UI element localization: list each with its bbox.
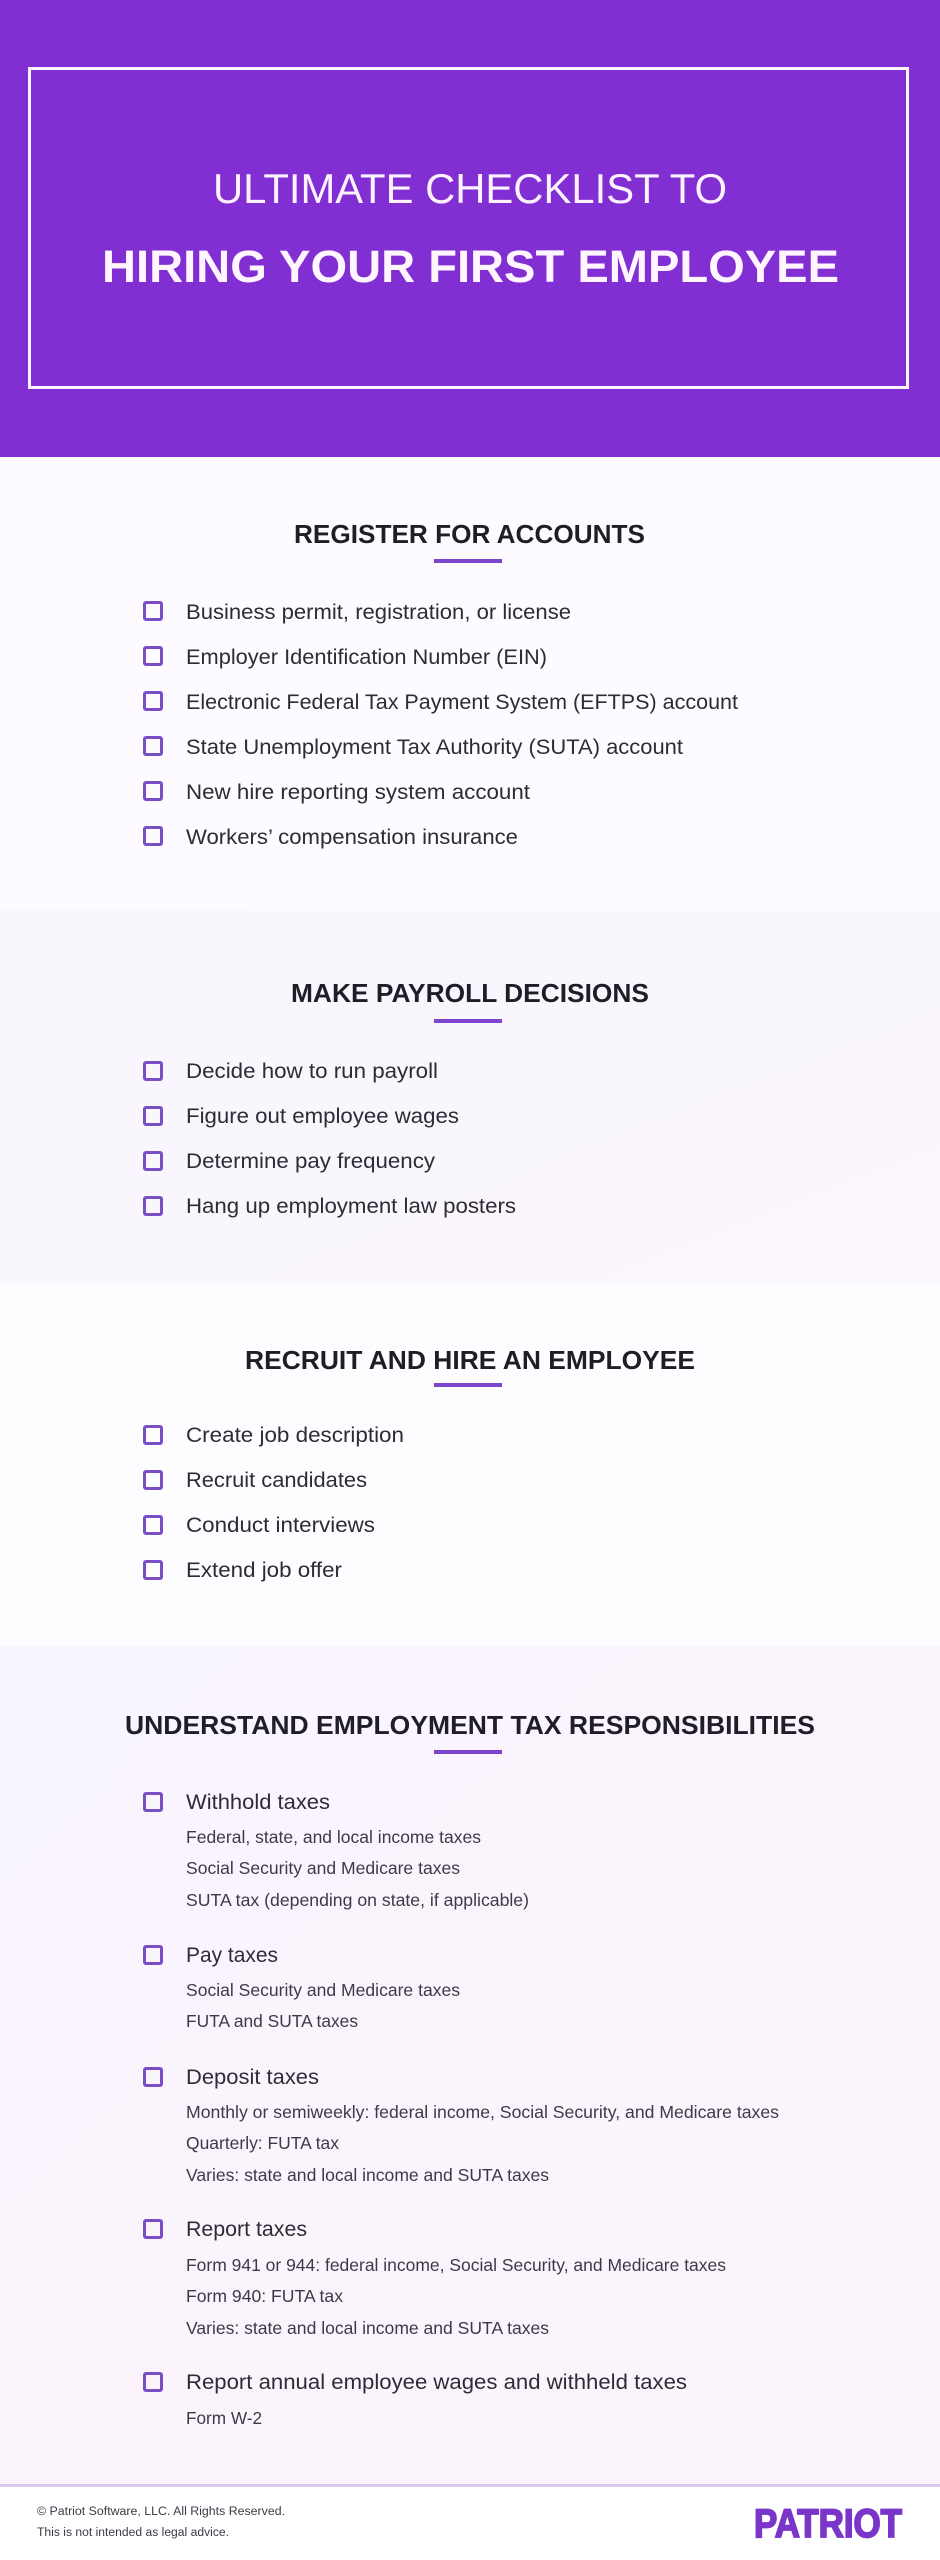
checklist item: posters: Hang up employment law posters — [186, 1194, 516, 1218]
checklist group: deposit taxes: Varies: state and local income and SUTA taxes — [186, 2165, 549, 2185]
footer — [0, 2484, 940, 2560]
checklist group: withhold taxes: Withhold taxes — [186, 1790, 330, 1814]
checklist group: pay taxes: FUTA and SUTA taxes — [186, 2011, 358, 2031]
checklist group: deposit taxes: Monthly or semiweekly: federal income, Social Security, and Medicare taxes — [186, 2102, 779, 2122]
checklist item: new hire: New hire reporting system account — [186, 780, 530, 804]
checklist group: withhold taxes: Social Security and Medicare taxes — [186, 1858, 460, 1878]
checklist group: withhold taxes: SUTA tax (depending on state, if applicable) — [186, 1890, 529, 1910]
title line two: HIRING YOUR FIRST EMPLOYEE — [102, 241, 839, 292]
heading underline — [434, 559, 502, 563]
heading: employment tax responsibilities: UNDERSTAND EMPLOYMENT TAX RESPONSIBILITIES — [125, 1712, 815, 1740]
checklist group: withhold taxes — [144, 1790, 529, 1910]
checklist item: workers compensation: Workers’ compensation insurance — [186, 825, 518, 849]
checklist group: pay taxes: Pay taxes — [186, 1943, 278, 1967]
checklist item: wages: Figure out employee wages — [186, 1104, 459, 1128]
checklist group: report annual wages: Form W-2 — [186, 2408, 262, 2428]
checklist item: interviews: Conduct interviews — [186, 1513, 375, 1537]
heading underline — [434, 1019, 502, 1023]
checklist item: EFTPS: Electronic Federal Tax Payment System (EFTPS) account — [186, 690, 738, 714]
checklist group: deposit taxes — [144, 2065, 779, 2185]
checklist item: run payroll: Decide how to run payroll — [186, 1059, 438, 1083]
checklist group: withhold taxes: Federal, state, and local income taxes — [186, 1827, 481, 1847]
panel: make payroll decisions — [0, 911, 940, 1283]
checklist group: deposit taxes: Quarterly: FUTA tax — [186, 2133, 339, 2153]
heading underline — [434, 1750, 502, 1754]
checklist group: report annual wages: Report annual employee wages and withheld taxes — [186, 2370, 687, 2394]
checklist item: SUTA: State Unemployment Tax Authority (SUTA) account — [186, 735, 683, 759]
header frame — [30, 68, 908, 388]
header banner — [0, 0, 940, 457]
checklist item: business permit: Business permit, registration, or license — [186, 600, 571, 624]
heading: register for accounts: REGISTER FOR ACCOUNTS — [294, 521, 645, 549]
heading underline — [434, 1383, 502, 1387]
panel: employment tax responsibilities — [0, 1647, 940, 2484]
checklist item: pay frequency: Determine pay frequency — [186, 1149, 435, 1173]
checklist item: job description: Create job description — [186, 1423, 404, 1447]
checklist group: pay taxes — [144, 1943, 460, 2031]
panel: recruit and hire — [0, 1283, 940, 1647]
checklist group: report taxes: Varies: state and local income and SUTA taxes — [186, 2318, 549, 2338]
checklist group: report taxes: Report taxes — [186, 2217, 307, 2241]
checklist group: report annual wages — [144, 2370, 687, 2428]
checklist group: pay taxes: Social Security and Medicare taxes — [186, 1980, 460, 2000]
copyright text: © Patriot Software, LLC. All Rights Reserved. — [37, 2506, 285, 2518]
checklist item: recruit candidates: Recruit candidates — [186, 1468, 367, 1492]
checklist group: report taxes: Form 940: FUTA tax — [186, 2286, 343, 2306]
checklist group: deposit taxes: Deposit taxes — [186, 2065, 319, 2089]
panel: register for accounts — [0, 457, 940, 911]
checklist group: report taxes — [144, 2217, 726, 2338]
title line one: ULTIMATE CHECKLIST TO — [213, 165, 727, 212]
checklist group: report taxes: Form 941 or 944: federal income, Social Security, and Medicare taxes — [186, 2255, 726, 2275]
logo: Patriot: PATRIOT — [754, 2502, 902, 2546]
heading: recruit and hire: RECRUIT AND HIRE AN EMPLOYEE — [245, 1347, 695, 1375]
checklist item: job offer: Extend job offer — [186, 1558, 342, 1582]
legal disclaimer: This is not intended as legal advice. — [37, 2527, 229, 2539]
heading: make payroll decisions: MAKE PAYROLL DECISIONS — [291, 980, 649, 1008]
checklist item: EIN: Employer Identification Number (EIN) — [186, 645, 547, 669]
